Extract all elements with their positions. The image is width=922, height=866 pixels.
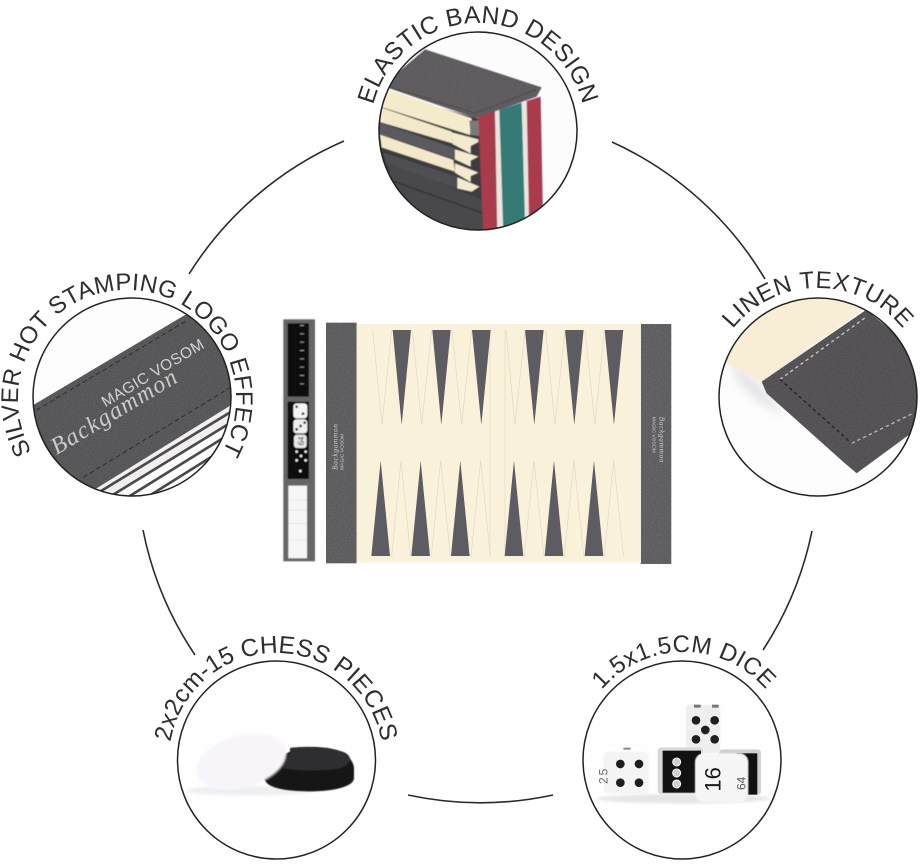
panel: dice [582,635,782,860]
heading: chess pieces size: 2x2cm-15 CHESS PIECES [155,636,397,741]
board spines [326,323,357,563]
photo: silver logo close-up: Backgammon [46,364,183,460]
photo: dice group: 16 [701,767,726,792]
connecting ring arcs [143,141,812,803]
heading: dice size: 1.5x1.5CM DICE [593,635,777,689]
photo: elastic band close-up [380,48,544,230]
panel: silver hot stamping logo effect [1,274,253,497]
panel: linen texture [718,271,918,497]
dark points [371,330,623,556]
storage tray: 64 [297,436,306,445]
circle outline [33,298,231,496]
photo: dice group: 25 [597,767,611,784]
spine logos: MAGIC VOSOM [339,434,345,470]
panel: elastic band design [358,6,598,231]
photo: black and white pieces [188,735,355,796]
storage tray [283,319,315,561]
circle outline [583,661,781,859]
central product: backgammon board and storage tray [283,319,671,564]
circle outline [178,661,376,859]
circle outline [379,32,577,230]
photo: dice group: 64 [735,776,749,790]
central product: backgammon board and storage tray: Backgammon [657,417,666,463]
heading: linen texture: LINEN TEXTURE [722,271,914,328]
central product: backgammon board and storage tray: Backgammon [330,423,339,470]
photo: dice group [598,704,769,804]
photo: linen texture close-up [726,298,916,474]
circle outline [719,298,917,496]
heading: elastic band design: ELASTIC BAND DESIGN [358,6,598,103]
photo: silver logo close-up: MAGIC VOSOM [99,336,208,411]
heading: silver hot stamping logo effect: SILVER HOT STAMPING LOGO EFFECT [1,274,253,459]
central product: backgammon board and storage tray: MAGIC VOSOM [651,417,657,453]
panel: chess pieces [155,636,397,860]
cream board surface [357,324,641,563]
outline points [373,330,624,556]
photo: silver logo close-up [34,314,230,496]
